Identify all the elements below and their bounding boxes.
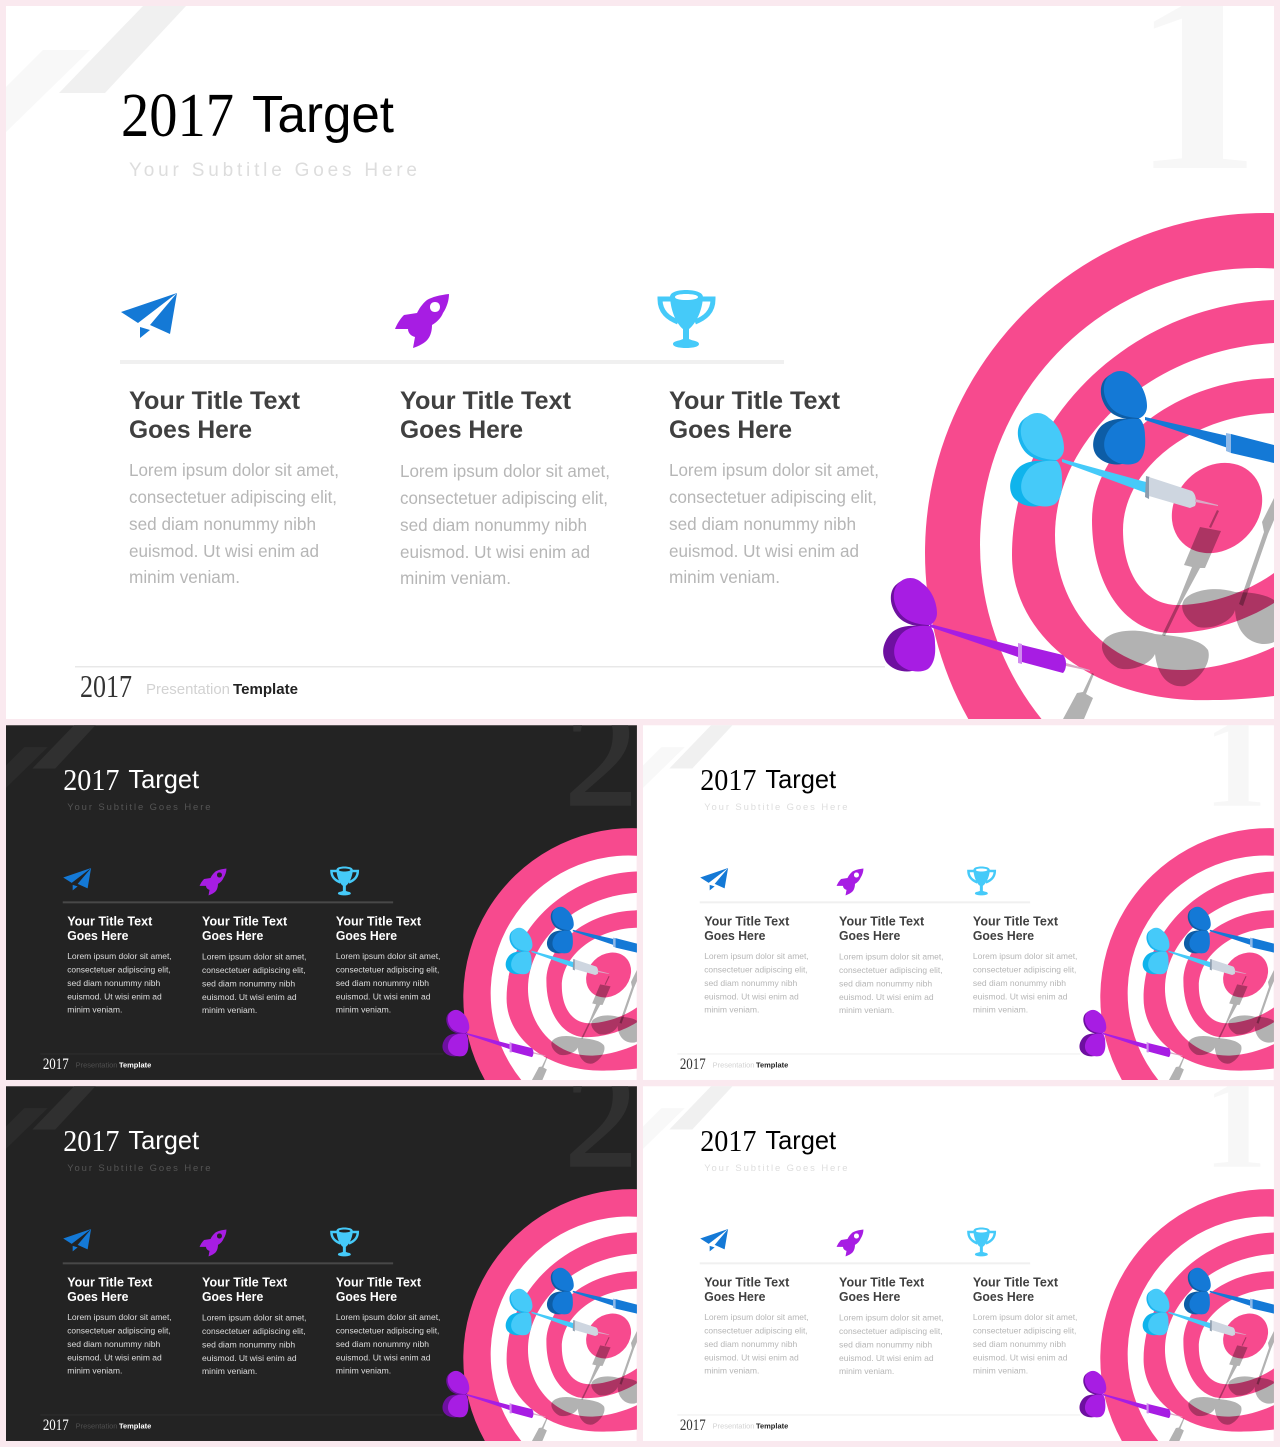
title: 2017 [700,1124,756,1158]
column 1: Goes Here [704,1290,765,1304]
column 2: consectetuer adipiscing elit, [202,1326,306,1336]
column 2: Goes Here [202,1290,263,1304]
column 3: euismod. Ut wisi enim ad [973,1352,1068,1362]
footer: Template [119,1422,151,1431]
column 1: Goes Here [129,416,252,444]
target with darts [1079,1189,1277,1441]
column 1 [67,1276,172,1375]
icon: trophy [968,1228,995,1256]
column 3: Lorem ipsum dolor sit amet, [669,460,879,480]
icon: paper plane [63,1229,91,1251]
column 3: sed diam nonummy nibh [973,978,1066,988]
column 1: sed diam nonummy nibh [67,978,160,988]
footer: Presentation [76,1422,117,1431]
column 3: consectetuer adipiscing elit, [973,964,1076,974]
column 3: Lorem ipsum dolor sit amet, [336,1312,440,1322]
column 1: Your Title Text [129,387,301,415]
column 2: sed diam nonummy nibh [202,978,295,988]
title: 2017 [63,763,119,797]
footer: 2017 [43,1417,69,1434]
column 2: minim veniam. [839,1005,894,1015]
column 3: minim veniam. [973,1004,1028,1014]
column 1: Goes Here [67,1290,128,1304]
column 2: minim veniam. [400,568,511,588]
title [123,94,394,143]
column 3: minim veniam. [973,1365,1028,1375]
big slide number: 2 [565,676,637,836]
icon: trophy [968,867,995,895]
column 2 [839,1276,944,1376]
subtitle: Your Subtitle Goes Here [704,1163,848,1174]
column 2: Your Title Text [400,387,572,415]
target with darts [883,213,1280,719]
column 3 [973,915,1077,1014]
column 3: Lorem ipsum dolor sit amet, [336,951,440,961]
column 1 [67,915,172,1014]
title: 2017 [121,82,234,150]
decorative slashes [670,726,732,768]
column 1: Your Title Text [704,1276,789,1290]
column 3: Your Title Text [973,915,1058,929]
subtitle: Your Subtitle Goes Here [704,802,848,813]
column 3: Goes Here [669,416,792,444]
column 2: Goes Here [400,416,523,444]
column 3: Your Title Text [336,1276,421,1290]
footer: Presentation [76,1061,117,1070]
column 2: Goes Here [839,1290,900,1304]
column 2: consectetuer adipiscing elit, [839,965,943,975]
column 2: Lorem ipsum dolor sit amet, [839,1313,944,1323]
column 1: sed diam nonummy nibh [704,978,797,988]
column 2: euismod. Ut wisi enim ad [400,542,590,562]
column 3: consectetuer adipiscing elit, [973,1325,1076,1335]
column 1: euismod. Ut wisi enim ad [704,991,799,1001]
column 3: consectetuer adipiscing elit, [669,487,877,507]
icon: trophy [331,1228,358,1256]
column 3: sed diam nonummy nibh [669,514,856,534]
title: Target [765,766,836,794]
column 1: euismod. Ut wisi enim ad [129,541,319,561]
icon: trophy [660,290,713,348]
column 2: Lorem ipsum dolor sit amet, [202,952,307,962]
title: Target [765,1127,836,1155]
panel: large white slide [6,0,1280,719]
decorative slashes [6,1086,96,1149]
decorative slashes [643,1086,733,1149]
title [64,770,199,794]
big slide number: 1 [1202,688,1268,835]
column 2 [202,1276,307,1376]
column 3: euismod. Ut wisi enim ad [973,991,1068,1001]
panel: white slide, row 1 [643,688,1277,1080]
column 1: Your Title Text [67,1276,152,1290]
divider rule [700,901,1030,903]
column 3: euismod. Ut wisi enim ad [336,991,431,1001]
icon: rocket [837,1229,863,1256]
footer: Template [233,681,298,698]
divider rule [63,1262,393,1264]
big slide number: 2 [565,1037,637,1197]
footer: Template [756,1422,788,1431]
target with darts [442,1189,640,1441]
target with darts [442,828,640,1080]
column 1: Lorem ipsum dolor sit amet, [67,951,172,961]
title: Target [252,86,395,144]
subtitle: Your Subtitle Goes Here [67,802,211,813]
column 2: Goes Here [202,929,263,943]
column 3: consectetuer adipiscing elit, [336,1325,439,1335]
title: Target [128,766,199,794]
panel: dark slide, row 1 [6,725,637,1080]
column 2: sed diam nonummy nibh [400,515,587,535]
column 3 [336,915,440,1014]
column 2: Your Title Text [839,915,924,929]
column 3 [669,387,879,587]
icon: paper plane [121,293,177,338]
decorative slashes [32,725,96,768]
column 1 [129,387,339,587]
icon: rocket [837,868,863,895]
column 1: Lorem ipsum dolor sit amet, [67,1312,172,1322]
panel: dark slide, row 2 [6,1037,640,1441]
column 2: consectetuer adipiscing elit, [202,965,306,975]
column 1: minim veniam. [67,1004,122,1014]
column 2: euismod. Ut wisi enim ad [202,992,297,1002]
footer: Presentation [713,1061,754,1070]
divider rule [63,901,393,903]
column 2: minim veniam. [202,1005,257,1015]
column 2 [202,915,307,1015]
title [701,770,836,794]
footer: 2017 [680,1056,706,1073]
icon: paper plane [700,1229,728,1251]
column 3: Goes Here [973,929,1034,943]
footer: 2017 [80,668,132,704]
panel: white slide, row 2 [643,1049,1277,1441]
column 3: Your Title Text [669,387,841,415]
column 3: sed diam nonummy nibh [336,978,429,988]
column 3: Your Title Text [973,1276,1058,1290]
title [63,1124,199,1158]
column 2: sed diam nonummy nibh [839,1339,932,1349]
column 3 [336,1276,440,1375]
column 1: euismod. Ut wisi enim ad [67,1352,162,1362]
column 1: consectetuer adipiscing elit, [704,1325,808,1335]
column 3: Lorem ipsum dolor sit amet, [973,1312,1077,1322]
column 3: euismod. Ut wisi enim ad [336,1352,431,1362]
column 2: sed diam nonummy nibh [839,978,932,988]
column 1: sed diam nonummy nibh [704,1339,797,1349]
icon: rocket [200,1229,226,1256]
icon: paper plane [700,868,728,890]
column 2: euismod. Ut wisi enim ad [202,1353,297,1363]
column 2: Goes Here [839,929,900,943]
column 3: Lorem ipsum dolor sit amet, [973,951,1077,961]
column 2: minim veniam. [202,1366,257,1376]
column 2: Your Title Text [202,1276,287,1290]
subtitle: Your Subtitle Goes Here [129,160,417,181]
divider rule [700,1262,1030,1264]
footer [677,1415,1080,1434]
column 1: euismod. Ut wisi enim ad [704,1352,799,1362]
column 3: Goes Here [336,929,397,943]
column 1: minim veniam. [704,1004,759,1014]
column 1: consectetuer adipiscing elit, [67,1325,171,1335]
icon: paper plane [63,868,91,890]
footer: Template [119,1061,151,1070]
column 1: consectetuer adipiscing elit, [704,964,808,974]
footer: Template [756,1061,788,1070]
column 3: Goes Here [973,1290,1034,1304]
icon: trophy [331,867,358,895]
title [700,1124,836,1158]
subtitle: Your Subtitle Goes Here [67,1163,211,1174]
footer [677,1054,1080,1073]
column 1: sed diam nonummy nibh [67,1339,160,1349]
footer [40,1415,443,1434]
footer: 2017 [43,1056,69,1073]
column 1: Your Title Text [67,915,152,929]
column 2: minim veniam. [839,1366,894,1376]
column 1: consectetuer adipiscing elit, [67,964,171,974]
title: 2017 [63,1124,119,1158]
column 3: minim veniam. [336,1365,391,1375]
footer: 2017 [680,1417,706,1434]
column 3: sed diam nonummy nibh [973,1339,1066,1349]
footer [75,666,885,698]
footer [40,1054,444,1069]
column 2: consectetuer adipiscing elit, [839,1326,943,1336]
column 1: Your Title Text [704,915,789,929]
column 2: consectetuer adipiscing elit, [400,488,608,508]
column 1: Lorem ipsum dolor sit amet, [129,460,339,480]
column 1: Lorem ipsum dolor sit amet, [704,1312,809,1322]
column 3: Your Title Text [336,915,421,929]
column 3: euismod. Ut wisi enim ad [669,541,859,561]
column 2: Your Title Text [202,915,287,929]
footer: Presentation [713,1422,754,1431]
column 1: minim veniam. [704,1365,759,1375]
divider rule [120,360,784,364]
icon: rocket [395,294,449,348]
column 2: euismod. Ut wisi enim ad [839,992,934,1002]
column 3: consectetuer adipiscing elit, [336,964,439,974]
big slide number: 1 [1202,1049,1268,1196]
target with darts [1079,828,1277,1080]
big slide number [1213,158,1218,159]
column 3: sed diam nonummy nibh [336,1339,429,1349]
column 3 [973,1276,1077,1375]
column 2: Lorem ipsum dolor sit amet, [839,952,944,962]
column 2 [839,915,944,1015]
column 1: consectetuer adipiscing elit, [129,487,337,507]
title: 2017 [700,763,756,797]
column 1: minim veniam. [129,567,240,587]
column 2: Lorem ipsum dolor sit amet, [400,461,610,481]
column 1: minim veniam. [67,1365,122,1375]
column 1 [704,1276,809,1375]
column 3: Goes Here [336,1290,397,1304]
column 1: Goes Here [704,929,765,943]
column 2: Your Title Text [839,1276,924,1290]
column 2: Lorem ipsum dolor sit amet, [202,1313,307,1323]
column 1 [704,915,809,1014]
column 2: sed diam nonummy nibh [202,1339,295,1349]
footer: Presentation [146,681,230,698]
column 2: euismod. Ut wisi enim ad [839,1353,934,1363]
title: Target [128,1127,199,1155]
column 1: Lorem ipsum dolor sit amet, [704,951,809,961]
column 1: euismod. Ut wisi enim ad [67,991,162,1001]
column 3: minim veniam. [336,1004,391,1014]
column 2 [400,387,610,588]
column 1: Goes Here [67,929,128,943]
decorative slashes [60,6,186,93]
column 3: minim veniam. [669,567,780,587]
column 1: sed diam nonummy nibh [129,514,316,534]
icon: rocket [200,868,226,895]
